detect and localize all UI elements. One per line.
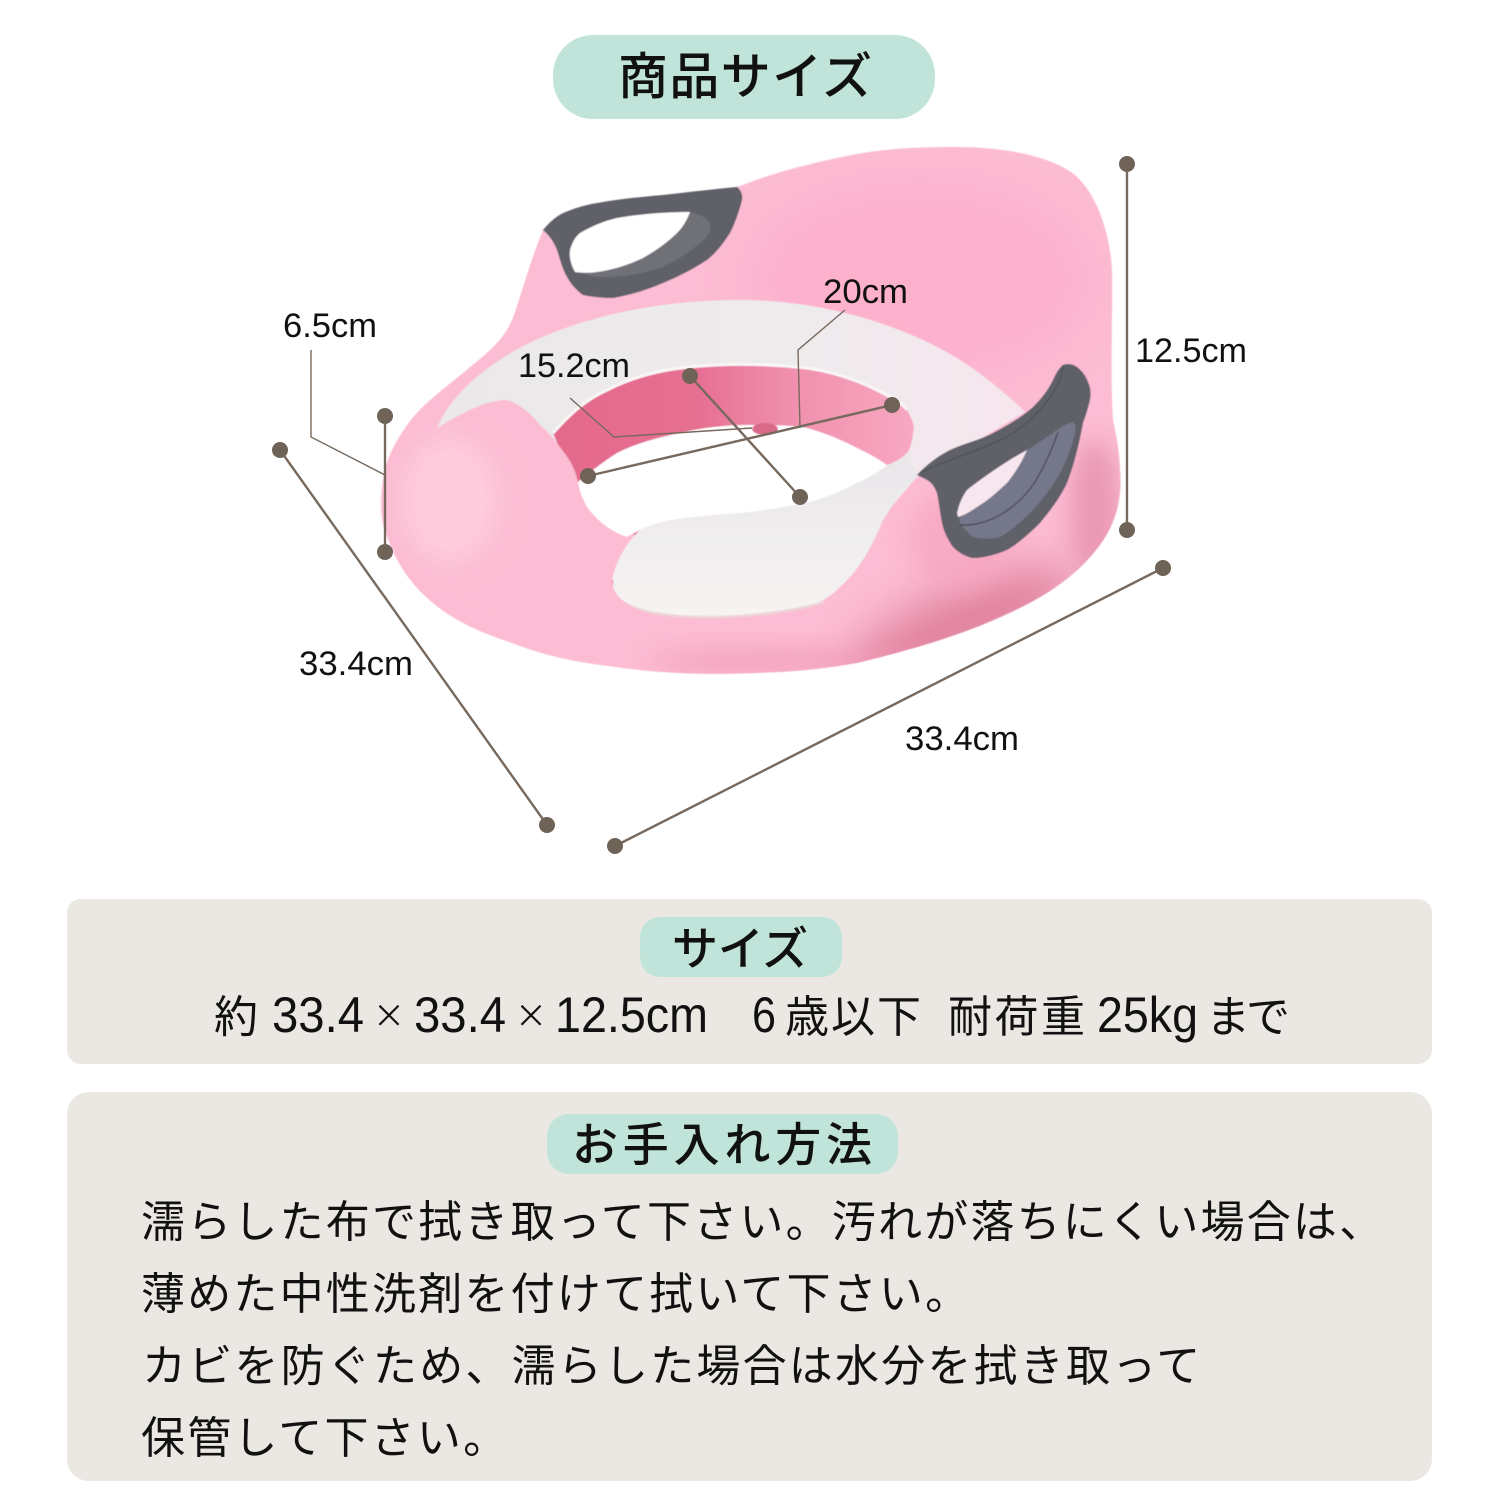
splash guard: [383, 400, 650, 625]
backrest shading: [766, 192, 1074, 366]
dimension: height 12.5cm: [1119, 156, 1247, 538]
spec line: ×: [515, 991, 547, 1037]
dimension: left depth 33.4cm: [272, 442, 555, 833]
front pad: [612, 453, 917, 618]
spec line: 12.5cm: [555, 987, 708, 1043]
spec line: 33.4: [272, 987, 364, 1043]
title: 商品サイズ: 商品サイズ: [618, 37, 872, 109]
panel: care instructions: [67, 1092, 1432, 1481]
dimension: height 12.5cm: 12.5cm: [1135, 332, 1247, 370]
care text: カビを防ぐため、濡らした場合は水分を拭き取って: [142, 1330, 1202, 1394]
spec line: 6: [752, 987, 776, 1043]
dimension: seat height 6.5cm: 6.5cm: [283, 307, 377, 345]
dimension: left depth 33.4cm: 33.4cm: [299, 645, 413, 683]
spec line: 歳以下: [785, 981, 921, 1045]
right handle: [917, 364, 1091, 558]
dimension: seat height 6.5cm: [283, 307, 393, 560]
heading: お手入れ方法: お手入れ方法: [572, 1109, 872, 1175]
left handle inner bevel: [583, 212, 710, 277]
spec line: ×: [373, 991, 405, 1037]
spec line: 耐荷重: [948, 981, 1085, 1045]
dimension: hole depth 15.2cm: [518, 347, 808, 505]
spec line: 約: [214, 981, 258, 1045]
care text: 濡らした布で拭き取って下さい。汚れが落ちにくい場合は、: [141, 1186, 1385, 1250]
seat body: [370, 140, 1130, 703]
front right shading: [844, 547, 1078, 664]
panel: size: [67, 899, 1432, 1064]
dimension: hole depth 15.2cm: 15.2cm: [518, 347, 630, 385]
toilet opening: [578, 425, 887, 537]
spec line: 33.4: [414, 987, 506, 1043]
dimension: hole width 20cm: 20cm: [823, 273, 908, 311]
product photo: pink potty seat: [370, 140, 1130, 703]
spec line: [214, 981, 1290, 1045]
care text: 薄めた中性洗剤を付けて拭いて下さい。: [141, 1258, 971, 1322]
spec line: まで: [1206, 981, 1290, 1045]
dimension: hole width 20cm: [580, 273, 908, 484]
dimension: front width 33.4cm: 33.4cm: [905, 720, 1019, 758]
heading: サイズ: [640, 913, 842, 979]
right handle opening: [957, 450, 1027, 517]
care text: 保管して下さい。: [141, 1402, 509, 1466]
dimension: front width 33.4cm: [607, 560, 1171, 854]
small pink stub: [752, 423, 778, 435]
inner pink wall: [553, 364, 914, 540]
white ring: [437, 300, 1025, 540]
care text: [141, 1186, 1385, 1466]
spec line: 25kg: [1097, 987, 1198, 1043]
left handle opening: [570, 212, 690, 273]
right handle inner panel: [958, 422, 1076, 538]
title: 商品サイズ: [553, 35, 935, 119]
left handle: [543, 187, 742, 298]
heading: サイズ: サイズ: [672, 913, 808, 979]
